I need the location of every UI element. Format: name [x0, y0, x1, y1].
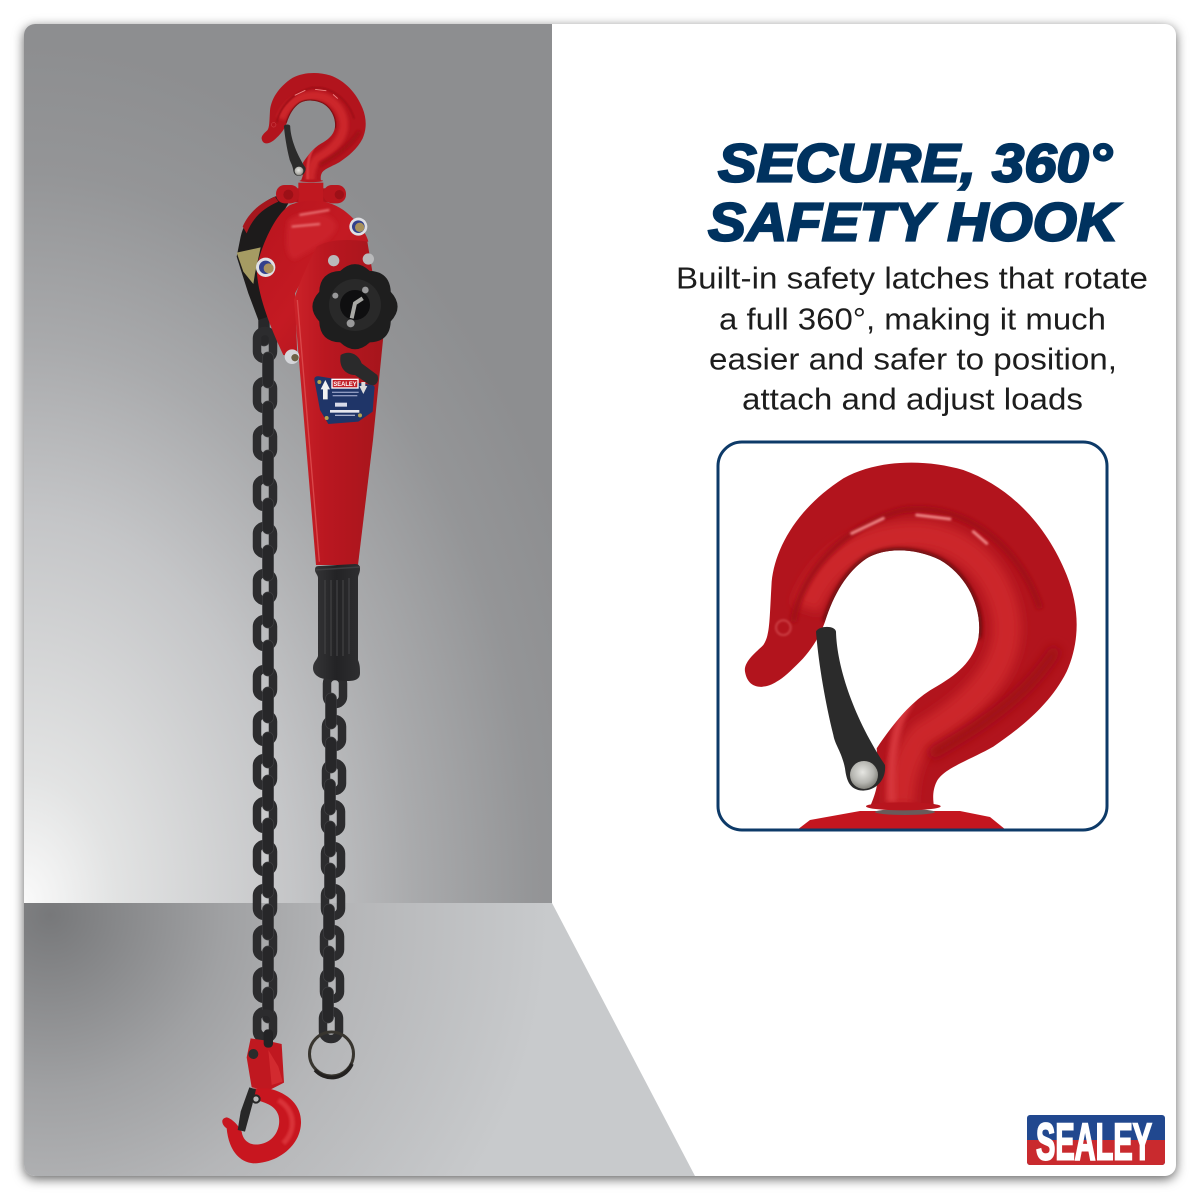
rubber grip [313, 564, 360, 681]
detail inset: safety hook close-up [718, 442, 1107, 830]
wall background [24, 24, 552, 903]
description text: Built-in safety latches that rotate [676, 260, 1148, 296]
bolts [256, 218, 374, 364]
lever arm [294, 240, 383, 565]
panel: product scene [24, 24, 695, 1176]
description text: attach and adjust loads [742, 382, 1083, 416]
chain end link [258, 1013, 273, 1036]
large hook [745, 463, 1077, 810]
data plate [314, 376, 375, 424]
right hand chain and ring [310, 676, 354, 1078]
floor [24, 903, 695, 1176]
swivel crown [276, 183, 346, 203]
pawl lever [340, 353, 378, 385]
black knob [313, 265, 397, 349]
heading [708, 134, 1122, 252]
description text [676, 260, 1148, 416]
swivel block [247, 1038, 284, 1091]
gold pulley insert [237, 247, 261, 284]
hoist body top in inset [799, 810, 1004, 828]
top hook [262, 73, 366, 182]
left hoist chain [257, 310, 274, 1039]
lever hoist body [237, 73, 397, 565]
housing [257, 200, 368, 357]
heading: SAFETY HOOK [708, 192, 1122, 252]
SEALEY logo: SEALEY [1036, 1112, 1152, 1171]
latch [238, 1087, 256, 1132]
bottom swivel load hook [222, 1013, 301, 1163]
description text: easier and safer to position, [709, 342, 1117, 376]
data plate: SEALEY [333, 381, 357, 388]
heading: SECURE, 360° [718, 134, 1112, 194]
description text: a full 360°, making it much [719, 302, 1106, 336]
pulley cover [237, 196, 288, 320]
hook body [222, 1088, 301, 1163]
